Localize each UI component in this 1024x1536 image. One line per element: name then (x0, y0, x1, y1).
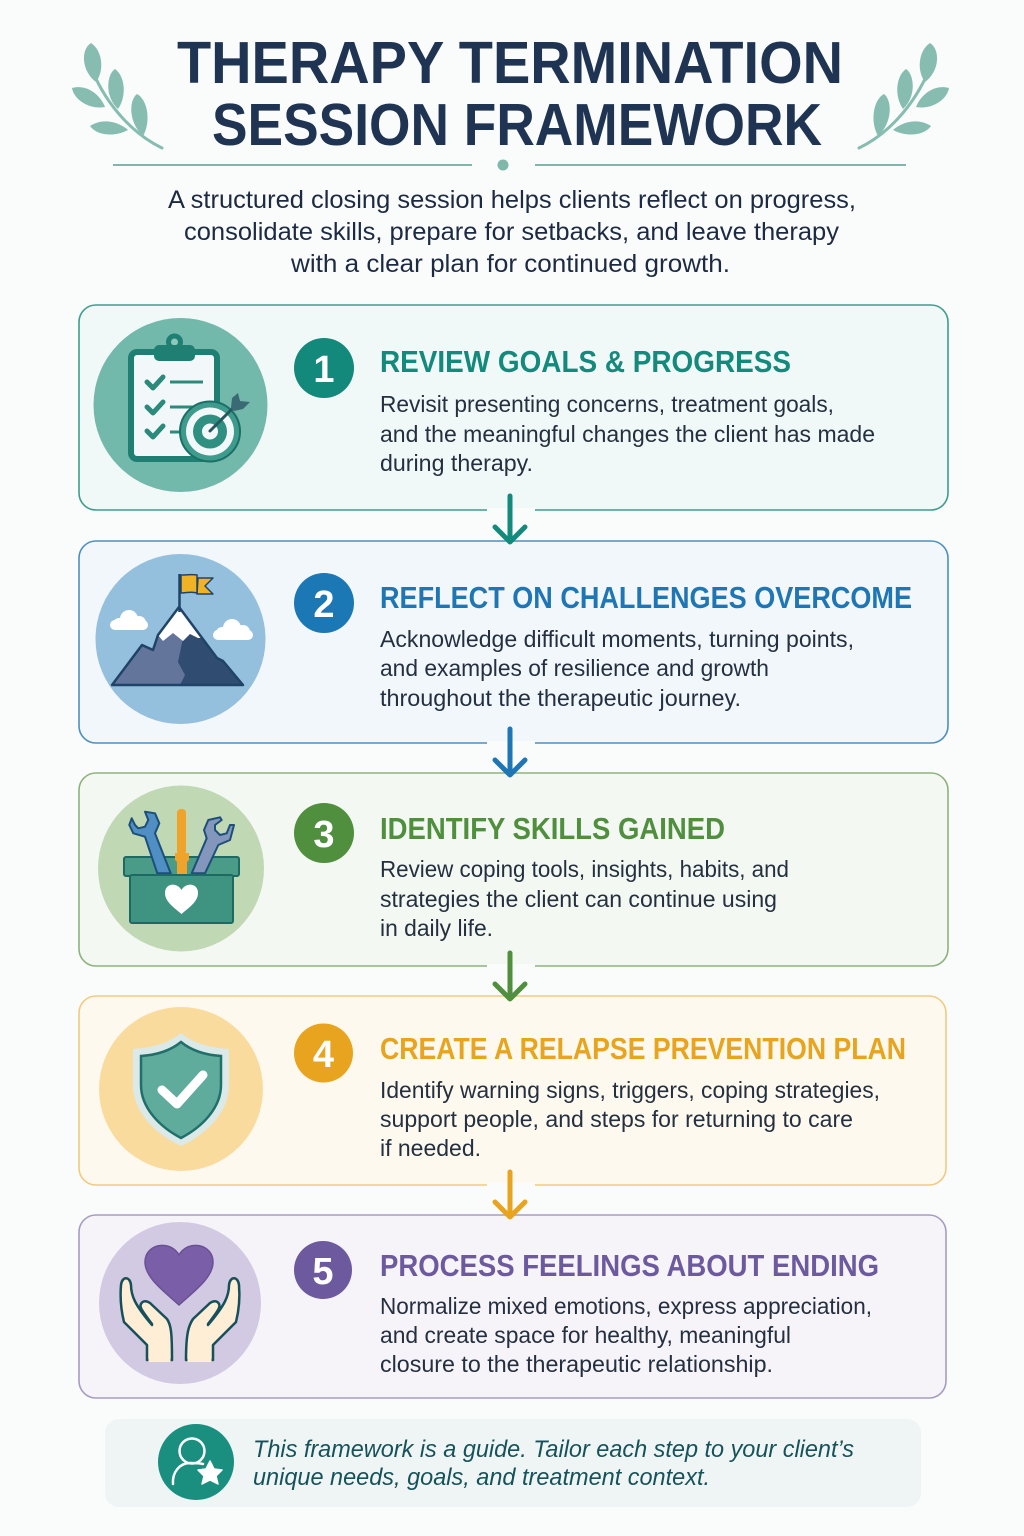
step 1 description (380, 391, 875, 476)
callout: footer note (105, 1419, 921, 1507)
step 3 number badge: 3 (313, 814, 335, 856)
intro text: consolidate skills, prepare for setbacks, and leave therapy (184, 218, 839, 246)
step 4 card (79, 996, 946, 1185)
step 1 card (79, 305, 948, 510)
step 1 description: and the meaningful changes the client has made (380, 421, 875, 447)
step 4 description: if needed. (380, 1135, 481, 1161)
step 5 number badge: 5 (312, 1251, 334, 1293)
panel: step 2 reflect on challenges overcome (79, 541, 948, 743)
icon: left laurel sprig (72, 43, 162, 148)
panel: step 4 create a relapse prevention plan (79, 996, 946, 1185)
step 5 heading: PROCESS FEELINGS ABOUT ENDING (380, 1249, 879, 1283)
step 2 heading: REFLECT ON CHALLENGES OVERCOME (380, 581, 912, 615)
intro text: with a clear plan for continued growth. (290, 250, 730, 278)
icon: toolbox with tools (98, 786, 264, 952)
step 2 card (79, 541, 948, 743)
step 5 description: closure to the therapeutic relationship. (380, 1351, 773, 1377)
icon: clipboard and target (94, 318, 268, 492)
footer note text (253, 1436, 854, 1491)
step 5 description: Normalize mixed emotions, express appreciation, (380, 1293, 872, 1319)
icon: right laurel sprig (859, 43, 949, 148)
arrow: step 1 to step 2 (495, 496, 525, 542)
footer panel background (105, 1419, 921, 1507)
step 2 description (380, 626, 854, 711)
step 1 description: during therapy. (380, 450, 533, 476)
step 4 description: support people, and steps for returning to care (380, 1106, 853, 1132)
step 3 description: Review coping tools, insights, habits, and (380, 856, 789, 882)
step 3 card (79, 773, 948, 966)
step 1 description: Revisit presenting concerns, treatment goals, (380, 391, 834, 417)
title: SESSION FRAMEWORK (212, 92, 822, 158)
step 5 number badge (294, 1241, 352, 1299)
panel: step 1 review goals and progress (79, 305, 948, 510)
intro text (168, 186, 856, 278)
step 3 description (380, 856, 789, 941)
title (177, 30, 843, 158)
step 1 heading: REVIEW GOALS & PROGRESS (380, 345, 791, 379)
icon: shield with check (99, 1007, 263, 1171)
step 5 description (380, 1293, 872, 1377)
step 2 description: and examples of resilience and growth (380, 655, 769, 681)
step 3 number badge (294, 803, 354, 863)
intro text: A structured closing session helps clients reflect on progress, (168, 186, 856, 214)
step 5 card (79, 1215, 946, 1398)
step 4 description (380, 1077, 880, 1161)
icon: person with star (158, 1424, 234, 1500)
step 1 number badge: 1 (313, 349, 335, 391)
step 2 description: Acknowledge difficult moments, turning points, (380, 626, 854, 652)
step 3 description: strategies the client can continue using (380, 886, 777, 912)
step 3 heading: IDENTIFY SKILLS GAINED (380, 812, 725, 846)
icon: mountain with flag (96, 554, 266, 724)
step 4 number badge (294, 1024, 353, 1082)
step 4 number badge: 4 (313, 1034, 334, 1076)
footer note text: unique needs, goals, and treatment context. (253, 1464, 710, 1491)
step 2 number badge: 2 (313, 584, 335, 626)
step 5 description: and create space for healthy, meaningful (380, 1322, 791, 1348)
step 2 number badge (294, 573, 354, 633)
footer note text: This framework is a guide. Tailor each step to your client’s (253, 1436, 854, 1463)
step 2 description: throughout the therapeutic journey. (380, 685, 741, 711)
step 1 number badge (294, 338, 354, 398)
panel: step 5 process feelings about ending (79, 1215, 946, 1398)
panel: step 3 identify skills gained (79, 773, 948, 966)
arrow: step 2 to step 3 (495, 729, 525, 775)
step 3 description: in daily life. (380, 915, 493, 941)
title: THERAPY TERMINATION (177, 30, 843, 96)
step 4 description: Identify warning signs, triggers, coping strategies, (380, 1077, 880, 1103)
step 4 heading: CREATE A RELAPSE PREVENTION PLAN (380, 1032, 906, 1066)
arrow: step 4 to step 5 (495, 1172, 525, 1217)
title divider (113, 160, 906, 170)
icon: hands holding heart (99, 1222, 261, 1384)
arrow: step 3 to step 4 (495, 953, 525, 999)
